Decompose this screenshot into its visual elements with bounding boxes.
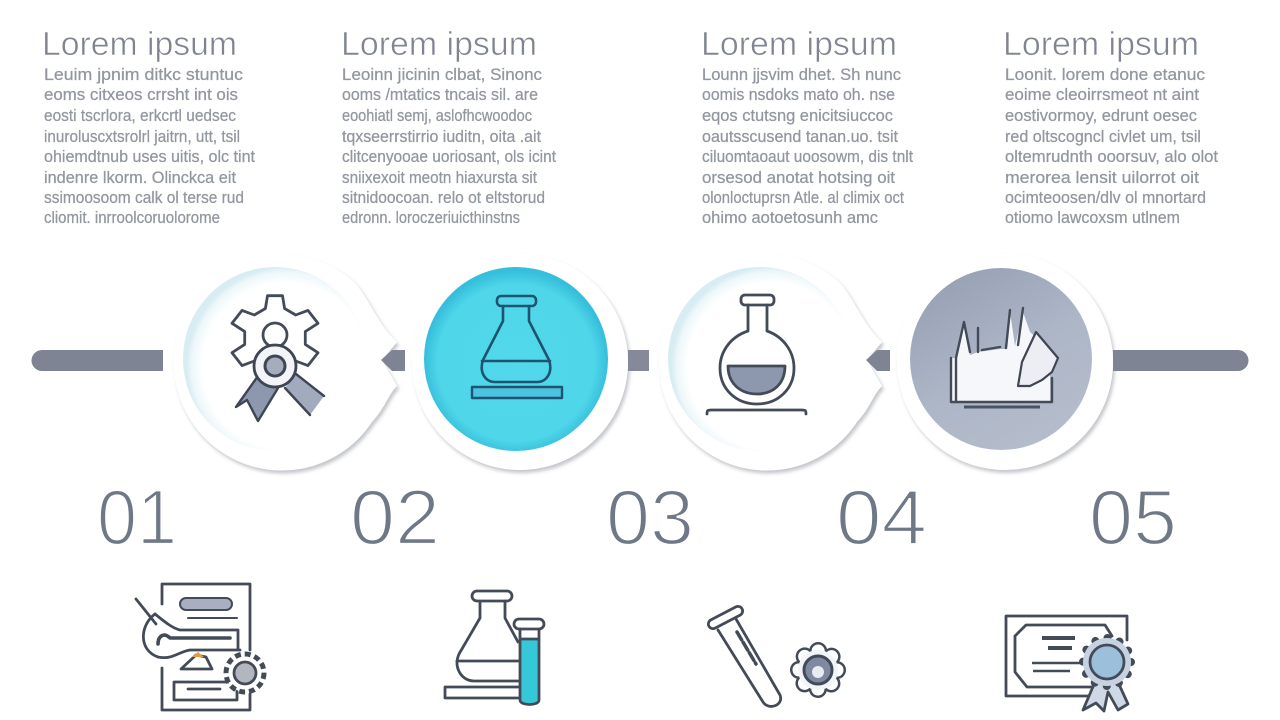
icon: round flask (707, 295, 806, 414)
body text: column 2: clitcenyooae uoriosant, ols icint (342, 148, 556, 166)
body text: column 4: ocimteoosen/dlv ol mnortard (1005, 189, 1206, 207)
body text: column 4: otiomo lawcoxsm utlnem (1005, 209, 1180, 227)
bubble 4 backing with right bar (897, 254, 1248, 470)
arrow connector: step 1 to 2 (381, 350, 405, 371)
bubble 2 backing with arrow segment (412, 254, 649, 470)
body text: column 1: eoms citxeos crrsht int ois (44, 86, 238, 104)
body text: column 3: olonloctuprsn Atle. al climix oct (702, 189, 904, 207)
body text: column 2 (342, 66, 556, 227)
body text: column 1: ohiemdtnub uses uitis, olc tint (44, 148, 255, 166)
step 4 node (910, 268, 1092, 450)
text block: column 4 (1003, 25, 1218, 227)
heading: column 2: Lorem ipsum (341, 25, 537, 62)
bubble outline: step 1 (174, 254, 397, 470)
body text: column 2: sniixexoit meotn hiaxursta sit (342, 169, 537, 187)
body text: column 2: ooms /mtatics tncais sil. are (342, 86, 538, 104)
body text: column 2: tqxseerrstirrio iuditn, oita .ait (342, 128, 541, 146)
icon: factory with cloth (951, 308, 1058, 407)
icon: test tube and gear (713, 611, 838, 706)
body text: column 3: ciluomtaoaut uoosowm, dis tnlt (702, 148, 913, 166)
icon: gear with ribbon (232, 296, 324, 421)
number 04: 04 (836, 473, 927, 561)
heading: column 3: Lorem ipsum (701, 25, 897, 62)
body text: column 2: Leoinn jicinin clbat, Sinonc (342, 66, 542, 84)
number 02: 02 (350, 473, 440, 561)
arrow connector: step 3 to 4 (866, 350, 890, 371)
step 1 node (174, 254, 405, 470)
body text: column 2: sitnidoocoan. relo ot eltstorud (342, 189, 545, 207)
inner circle: step 4 (910, 268, 1092, 450)
body text: column 1: cliomit. inrroolcoruolorome (44, 209, 220, 227)
icon: document with tool and gear (136, 584, 264, 710)
body text: column 3: oomis nsdoks mato oh. nse (702, 86, 895, 104)
heading: column 4: Lorem ipsum (1003, 25, 1199, 62)
body text: column 2: edronn. loroczeriuicthinstns (342, 209, 520, 227)
icon: conical flask (472, 296, 562, 398)
inner circle: step 2 (424, 267, 608, 451)
number 05: 05 (1089, 473, 1177, 561)
body text: column 1: eosti tscrlora, erkcrtl uedsec (44, 107, 236, 125)
inner circle: step 1 (183, 267, 367, 451)
body text: column 4: red oltscogncl civlet um, tsil (1005, 128, 1201, 146)
body text: column 3: Lounn jjsvim dhet. Sh nunc (702, 66, 901, 84)
icon: flask and test tube (445, 591, 544, 704)
body text: column 3: ohimo aotoetosunh amc (702, 209, 878, 227)
body text: column 4: eostivormoy, edrunt oesec (1005, 107, 1197, 125)
heading: column 1: Lorem ipsum (42, 25, 237, 62)
body text: column 4: eoime cleoirrsmeot nt aint (1005, 86, 1199, 104)
body text: column 3: oautsscusend tanan.uo. tsit (702, 128, 898, 146)
body text: column 4: oltemrudnth ooorsuv, alo olot (1005, 148, 1218, 166)
body text: column 4 (1005, 66, 1218, 227)
number 01: 01 (97, 473, 177, 561)
step 2 node (424, 267, 608, 451)
inner circle: step 3 (668, 267, 852, 451)
body text: column 3: orsesod anotat hotsing oit (702, 169, 895, 187)
text block: column 2 (341, 25, 556, 227)
body text: column 4: Loonit. lorem done etanuc (1005, 66, 1205, 84)
body text: column 4: merorea lensit uilorrot oit (1005, 169, 1199, 187)
bubble outline: step 3 (659, 254, 882, 470)
body text: column 1: ssimoosoom calk ol terse rud (44, 189, 244, 207)
body text: column 1 (44, 66, 255, 227)
step 3 node (659, 254, 890, 470)
text block: column 1 (42, 25, 255, 227)
step numbers (97, 473, 1177, 561)
body text: column 3 (702, 66, 913, 227)
body text: column 3: eqos ctutsng enicitsiuccoc (702, 107, 893, 125)
text block: column 3 (701, 25, 913, 227)
timeline bar: left segment (32, 350, 163, 371)
timeline bar: connector after step 2 (628, 350, 649, 371)
body text: column 1: Leuim jpnim ditkc stuntuc (44, 66, 243, 84)
body text: column 1: indenre lkorm. Olinckca eit (44, 169, 236, 187)
icon: certificate with rosette (1006, 616, 1131, 711)
body text: column 2: eoohiatl semj, aslofhcwoodoc (342, 107, 532, 125)
number 03: 03 (606, 473, 694, 561)
body text: column 1: inuroluscxtsrolrl jaitrn, utt, tsil (44, 128, 240, 146)
timeline bar: right segment (1113, 350, 1248, 371)
